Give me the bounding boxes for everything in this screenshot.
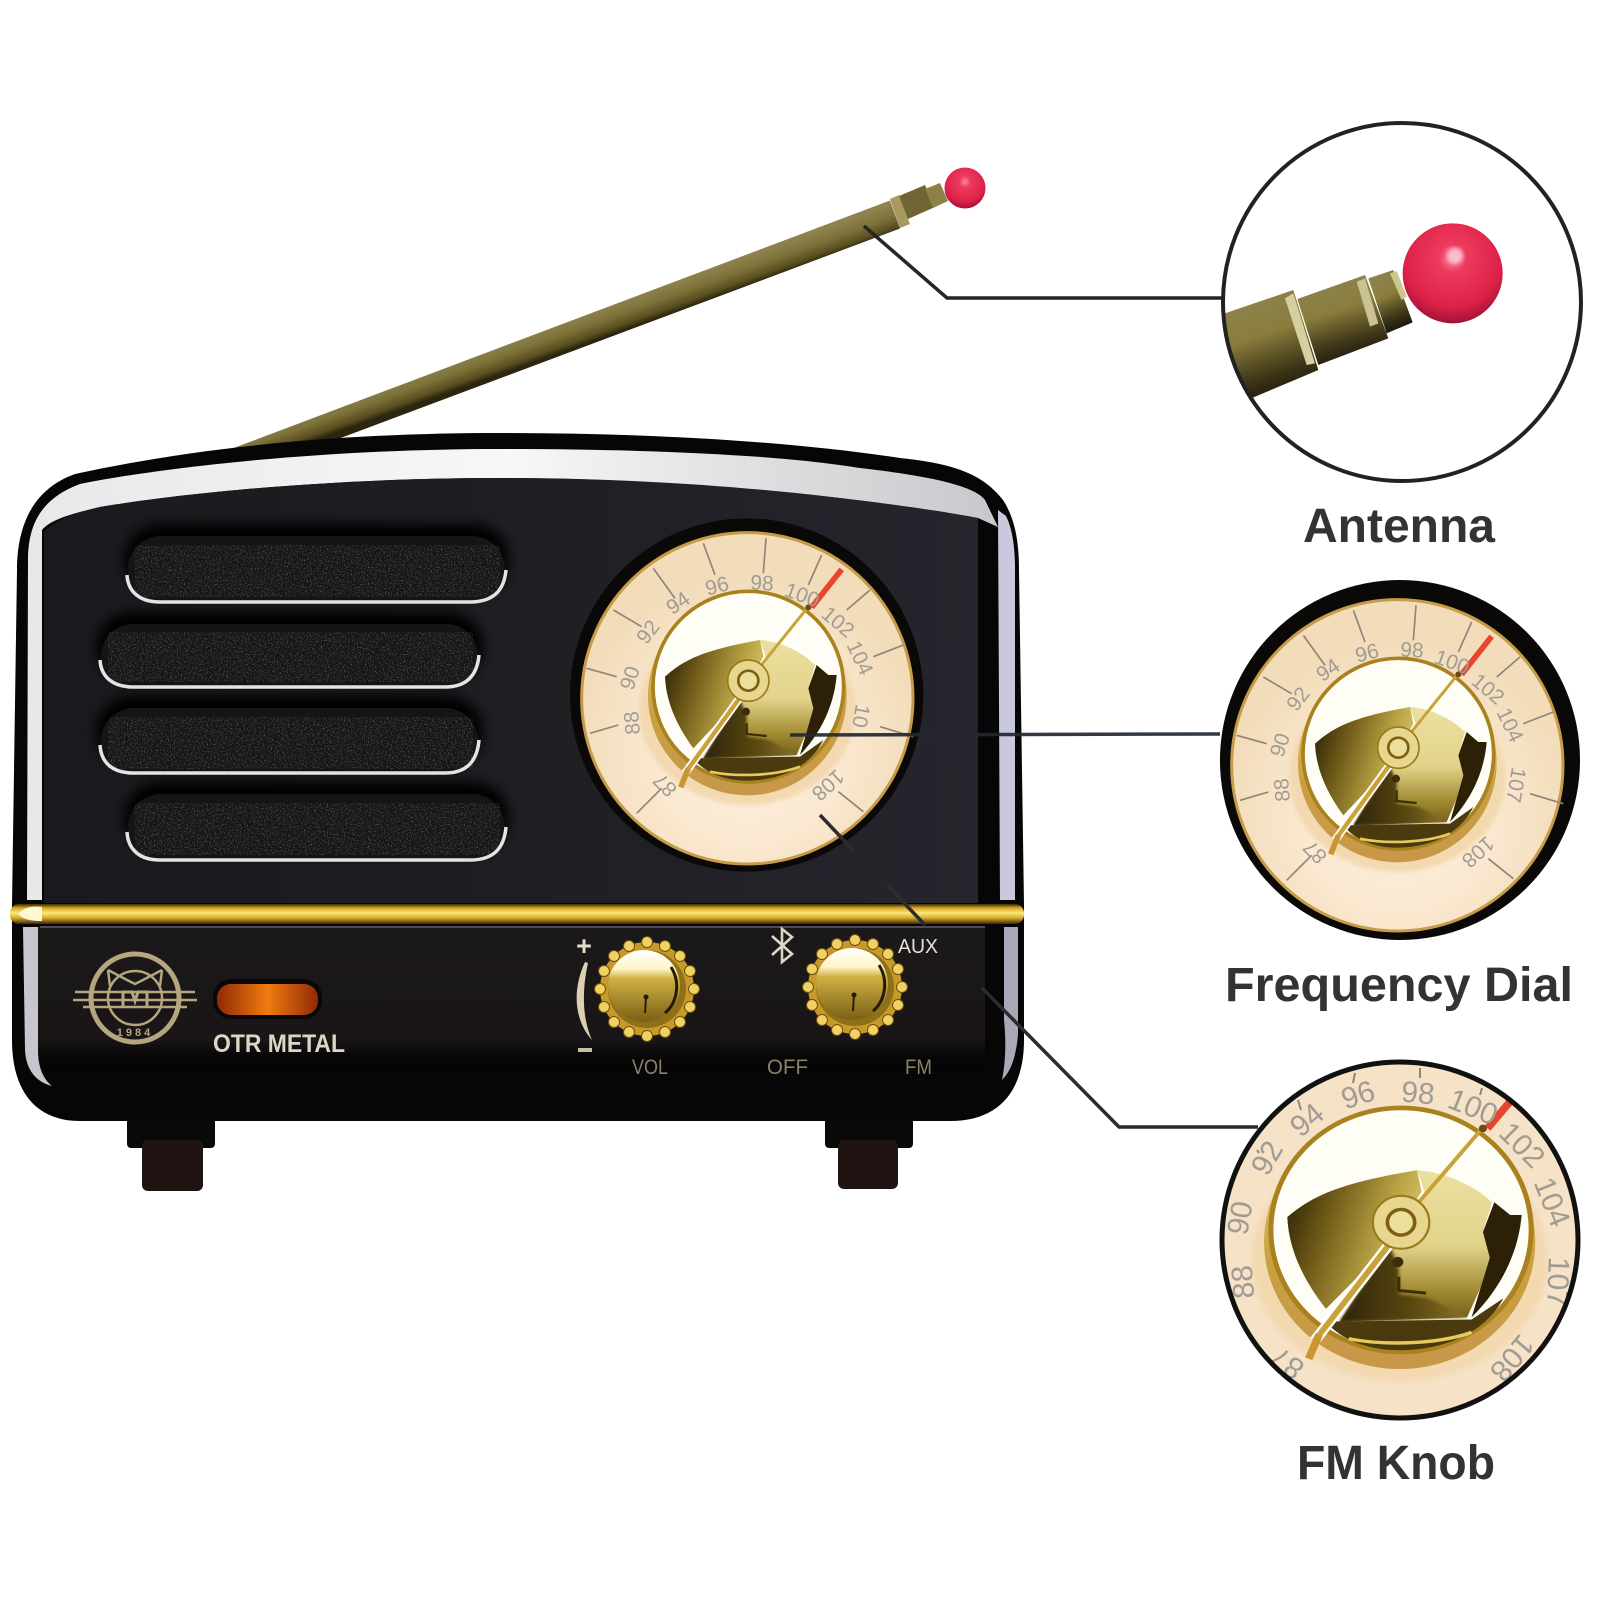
callout: antenna [1220, 123, 1581, 481]
dial numbers: 90 [616, 663, 645, 693]
close-up dial numbers: 87 [1299, 835, 1332, 868]
close-up dial numbers: 100 [1431, 646, 1472, 679]
radio body [12, 433, 1024, 1121]
dial numbers: 96 [703, 572, 731, 601]
short ticks [1257, 1068, 1482, 1153]
close-up dial numbers: 108 [1457, 831, 1498, 872]
close-up dial numbers: 96 [1353, 639, 1381, 668]
close-up dial numbers: 94 [1312, 654, 1345, 687]
close-up knob numbers: 90 [1221, 1199, 1260, 1237]
close-up knob numbers: 94 [1284, 1097, 1331, 1144]
fm knob close-up [1221, 1068, 1576, 1387]
close-up dial numbers: 92 [1282, 683, 1315, 716]
power indicator light [213, 979, 322, 1019]
close-up knob numbers: 104 [1527, 1173, 1576, 1232]
mode knob [802, 934, 908, 1040]
close-up dial numbers: 104 [1492, 704, 1528, 746]
volume scale marks [576, 931, 592, 1052]
control labels: AUX [898, 936, 938, 958]
close-up knob numbers: 87 [1264, 1340, 1310, 1386]
close-up knob numbers: 100 [1443, 1083, 1502, 1132]
speaker slots [96, 524, 509, 861]
callout: fm knob [1221, 1062, 1578, 1418]
close-up knob numbers [1221, 1075, 1576, 1387]
lower panel [38, 927, 985, 1072]
callout: frequency dial [1220, 580, 1580, 940]
top white highlight [27, 449, 998, 900]
leader line: frequency dial [790, 734, 1220, 735]
feet [127, 1118, 913, 1191]
close-up dial numbers: 102 [1467, 669, 1508, 709]
close-up knob numbers: 88 [1226, 1264, 1261, 1300]
close-up knob numbers: 98 [1400, 1076, 1436, 1111]
frequency dial close-up [1220, 585, 1573, 939]
dial numbers: 94 [662, 587, 695, 620]
close-up dial numbers [1266, 638, 1530, 872]
brand logo: 1984 [117, 1027, 153, 1039]
radio illustration [10, 168, 1024, 1191]
leader line: fm knob [820, 815, 1258, 1127]
antenna red tip [944, 168, 986, 208]
dial numbers: 102 [817, 602, 858, 642]
control labels [632, 936, 938, 1079]
label: fm knob: FM Knob [1297, 1437, 1495, 1490]
dial numbers: 92 [632, 616, 665, 649]
lower right highlight [1002, 927, 1018, 1080]
antenna close-up [1220, 223, 1503, 402]
dial numbers: 108 [807, 764, 848, 805]
close-up knob numbers: 108 [1483, 1328, 1540, 1387]
volume knob [594, 936, 700, 1042]
close-up dial numbers: 107 [1501, 766, 1530, 804]
right edge highlight [998, 510, 1015, 900]
frequency dial [570, 518, 923, 872]
dial numbers: 10 [847, 702, 874, 729]
dial numbers: 104 [842, 637, 878, 679]
dial numbers: 98 [750, 571, 774, 596]
leader line: antenna [864, 226, 1222, 298]
close-up knob numbers: 102 [1492, 1116, 1551, 1175]
lower left highlight [23, 927, 52, 1086]
gold trim band [10, 904, 1024, 928]
label: antenna: Antenna [1303, 500, 1495, 553]
close-up dial numbers: 98 [1400, 638, 1424, 663]
close-up dial numbers: 88 [1270, 777, 1295, 803]
antenna [231, 168, 986, 472]
dial numbers [616, 571, 878, 805]
volume scale marks: + [576, 931, 592, 961]
control labels: FM [905, 1056, 932, 1079]
icon: bluetooth [772, 929, 792, 962]
control labels: OFF [767, 1056, 808, 1079]
close-up knob numbers: 107 [1540, 1256, 1575, 1308]
close-up knob numbers: 96 [1337, 1075, 1379, 1116]
dial numbers: 100 [781, 579, 822, 612]
dial numbers: 87 [649, 768, 682, 801]
dial numbers: 88 [620, 710, 645, 736]
brand logo [73, 954, 197, 1042]
close-up dial numbers: 90 [1266, 730, 1295, 760]
close-up knob numbers: 92 [1245, 1136, 1290, 1181]
brand text: OTR METAL [213, 1030, 345, 1058]
label: frequency dial: Frequency Dial [1225, 959, 1573, 1012]
upper panel [44, 478, 978, 903]
control labels: VOL [632, 1056, 668, 1079]
